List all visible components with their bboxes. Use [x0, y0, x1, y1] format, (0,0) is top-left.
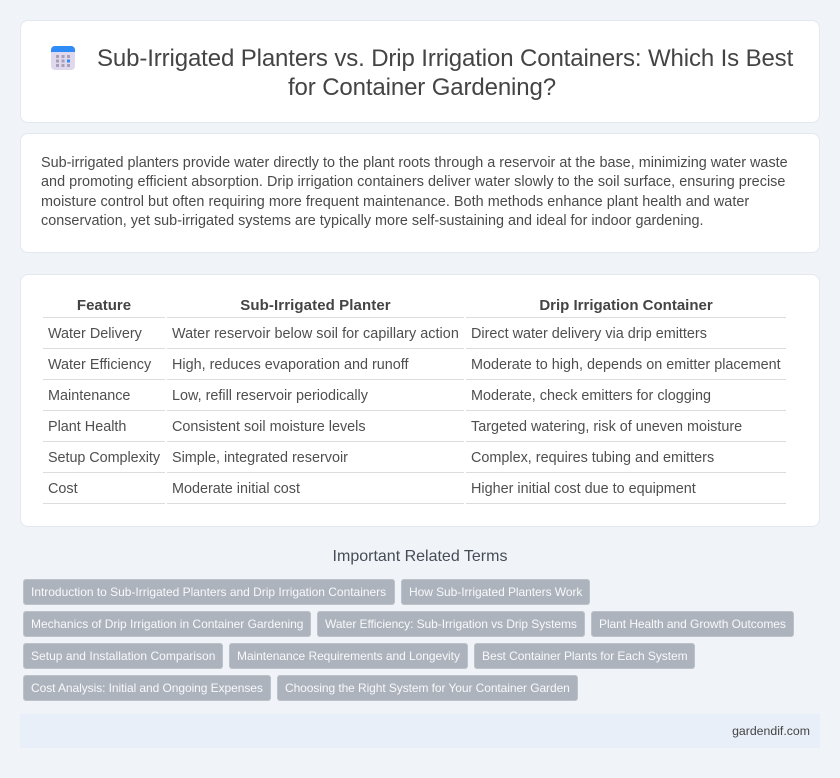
- panel: introduction: [20, 133, 820, 253]
- comparison table: [43, 297, 786, 504]
- related term chips: Best Container Plants for Each System: [482, 649, 688, 663]
- comparison table: Feature: [77, 297, 131, 314]
- comparison table: Low, refill reservoir periodically: [172, 388, 368, 404]
- comparison table: Plant Health: [48, 419, 126, 435]
- text block: introduction paragraph: Sub-irrigated planters provide water directly to the plant roots through a reservoir at the base, minimizing water waste: [41, 155, 788, 171]
- related term chips: How Sub-Irrigated Planters Work: [409, 585, 582, 599]
- comparison table: Direct water delivery via drip emitters: [471, 326, 707, 342]
- comparison table: Higher initial cost due to equipment: [471, 481, 696, 497]
- text block: introduction paragraph: conservation, yet sub-irrigated systems are typically more self-sustaining and ideal for indoor gardening.: [41, 213, 704, 229]
- comparison table: Moderate, check emitters for clogging: [471, 388, 711, 404]
- title: [97, 45, 794, 101]
- comparison table: Drip Irrigation Container: [539, 297, 713, 314]
- comparison table: Simple, integrated reservoir: [172, 450, 348, 466]
- related term chips: Water Efficiency: Sub-Irrigation vs Drip Systems: [325, 617, 577, 631]
- related term chips: Maintenance Requirements and Longevity: [237, 649, 460, 663]
- comparison table: Sub-Irrigated Planter: [240, 297, 391, 314]
- title: Sub-Irrigated Planters vs. Drip Irrigation Containers: Which Is Best: [97, 45, 793, 72]
- comparison table: Setup Complexity: [48, 450, 160, 466]
- comparison table: High, reduces evaporation and runoff: [172, 357, 409, 373]
- panel: title header: [20, 20, 820, 123]
- related term chips: [23, 579, 794, 701]
- icon: calendar: [51, 46, 75, 70]
- comparison table: Moderate initial cost: [172, 481, 300, 497]
- comparison table: Maintenance: [48, 388, 130, 404]
- text block: introduction paragraph: [41, 155, 788, 229]
- related term chips: Cost Analysis: Initial and Ongoing Expenses: [31, 681, 263, 695]
- heading: important related terms: Important Related Terms: [333, 548, 507, 565]
- comparison table: Cost: [48, 481, 78, 497]
- related term chips: Introduction to Sub-Irrigated Planters and Drip Irrigation Containers: [31, 585, 386, 599]
- footer bar: [20, 714, 820, 748]
- related term chips: Setup and Installation Comparison: [31, 649, 215, 663]
- comparison table: Water Delivery: [48, 326, 142, 342]
- title: for Container Gardening?: [288, 74, 556, 101]
- related term chips: Plant Health and Growth Outcomes: [599, 617, 786, 631]
- comparison table: Consistent soil moisture levels: [172, 419, 366, 435]
- panel: comparison table: [20, 274, 820, 527]
- related term chips: Mechanics of Drip Irrigation in Container Gardening: [31, 617, 303, 631]
- comparison table: Water Efficiency: [48, 357, 151, 373]
- footer source: gardendif.com: [732, 724, 810, 738]
- comparison table: Targeted watering, risk of uneven moisture: [471, 419, 742, 435]
- text block: introduction paragraph: moisture control but often requiring more frequent maintenance. Both methods enhance plant health and water: [41, 194, 749, 210]
- comparison table: Complex, requires tubing and emitters: [471, 450, 714, 466]
- text block: introduction paragraph: and promoting efficient absorption. Drip irrigation containers deliver water slowly to the soil surface, ensuring precise: [41, 174, 785, 190]
- related term chips: Choosing the Right System for Your Container Garden: [285, 681, 570, 695]
- comparison table: Moderate to high, depends on emitter placement: [471, 357, 781, 373]
- comparison table: Water reservoir below soil for capillary action: [172, 326, 459, 342]
